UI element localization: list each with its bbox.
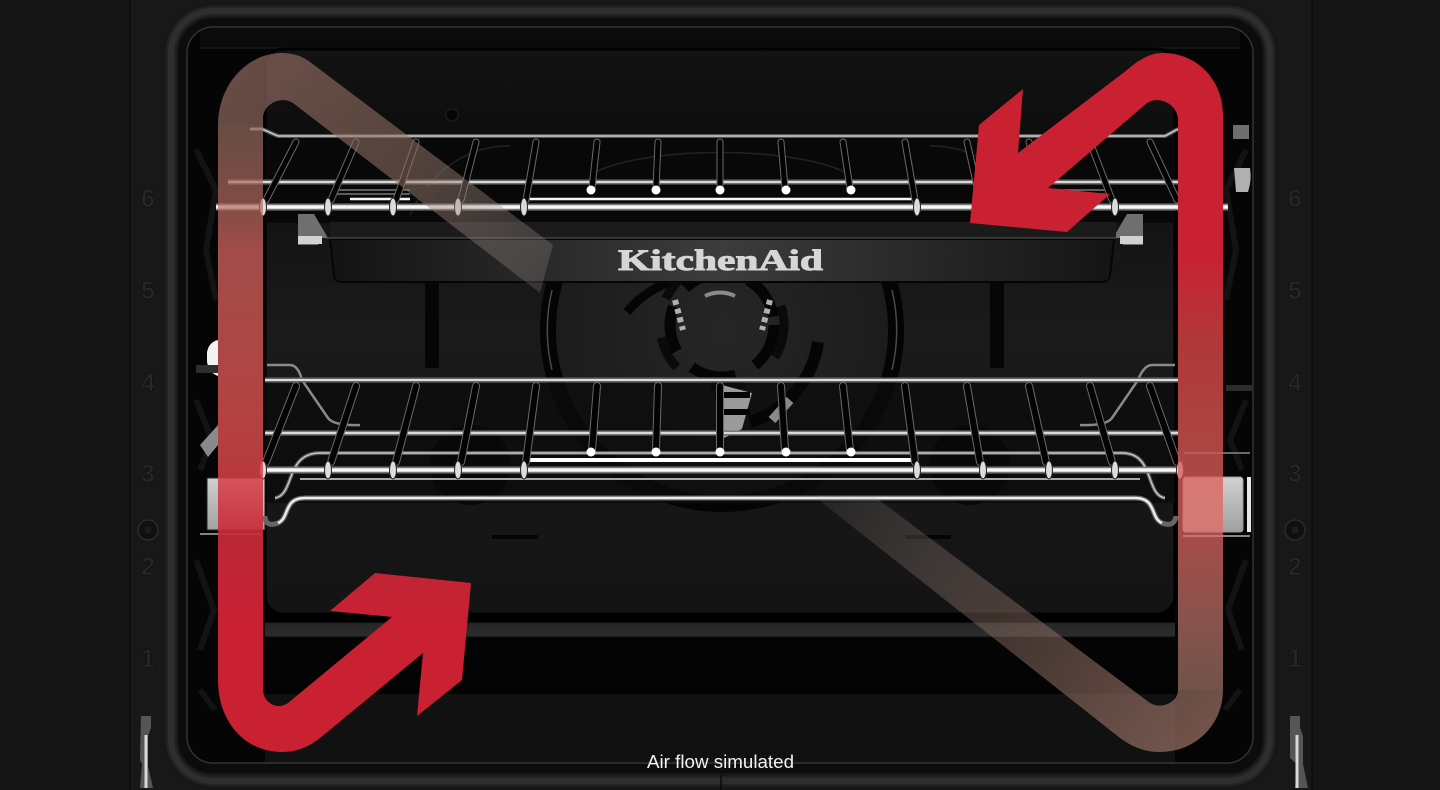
air flow: top-left return band [218, 53, 553, 293]
baking tray with logo [298, 214, 1143, 282]
logo: KitchenAid: KitchenAid [618, 244, 823, 277]
convection fan [265, 137, 1175, 505]
rack level numbers right: 4 [1288, 369, 1302, 397]
door gasket frame [171, 11, 1270, 790]
door hinges [140, 716, 1308, 788]
air flow arrow: left band, bottom-left arrow head [218, 125, 471, 752]
rack level numbers right: 3 [1288, 460, 1302, 488]
rack level numbers left: 5 [141, 277, 155, 305]
rack spokes [266, 386, 1177, 462]
rack level numbers left: 4 [141, 369, 155, 397]
oven cavity [178, 18, 1263, 773]
caption: Air flow simulated [647, 752, 794, 772]
rack level numbers left [138, 185, 158, 673]
air flow: bottom-right return band [815, 497, 1223, 752]
lower oven rack [260, 365, 1184, 524]
rack level numbers right [1285, 185, 1305, 673]
rack level numbers left: 3 [141, 460, 155, 488]
rack level numbers right: 5 [1288, 277, 1302, 305]
rack level numbers left: 6 [141, 185, 155, 213]
rack level numbers left: 1 [141, 645, 155, 673]
upper oven rack [216, 129, 1228, 216]
rack level numbers left: 2 [141, 553, 155, 581]
rack spokes [266, 142, 1177, 200]
side wall details [196, 125, 1252, 710]
rack level numbers right: 2 [1288, 553, 1302, 581]
rack level numbers right: 6 [1288, 185, 1302, 213]
air flow arrow: right band, top-right arrow head [970, 53, 1223, 690]
rack level numbers right: 1 [1288, 645, 1302, 673]
